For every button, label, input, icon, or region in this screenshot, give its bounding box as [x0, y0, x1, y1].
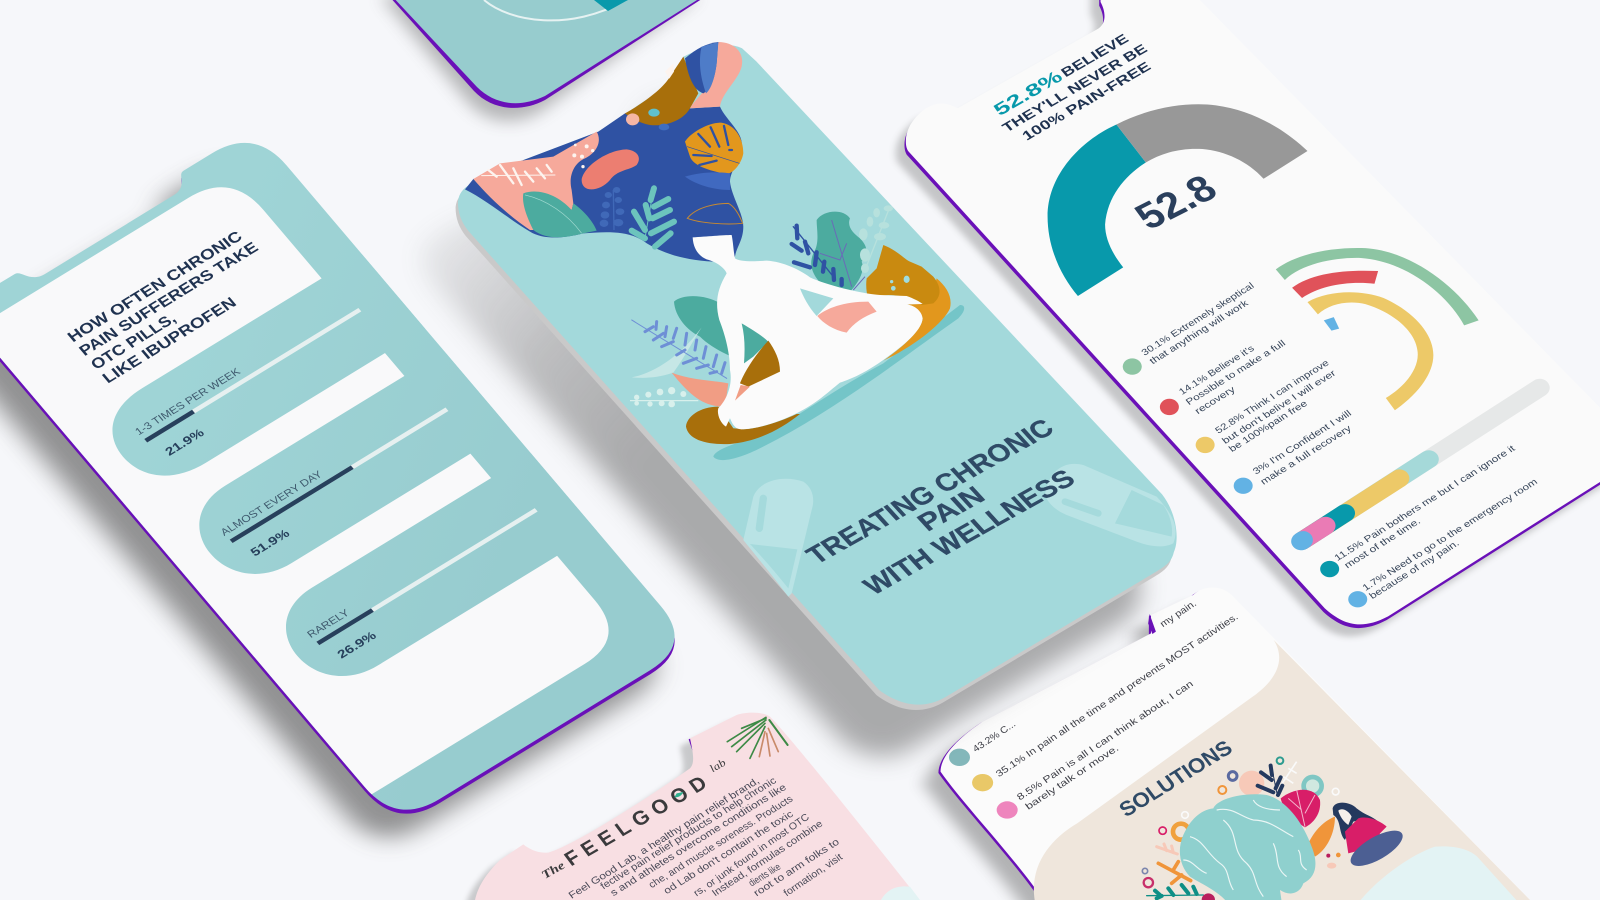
brand logo: FEELGOOD: [560, 772, 712, 871]
phone: 52.8% believe: [904, 0, 1600, 628]
illustration: figure with plants: [630, 205, 964, 460]
illustration: brain and meditating woman: [1142, 757, 1408, 900]
brand description: Instead, formulas combine: [710, 818, 826, 899]
severity legend: [949, 598, 1240, 819]
legend: recovery beliefs: but don't belive I will ever: [1220, 368, 1338, 446]
legend: pain level: most of the time.: [1342, 516, 1423, 571]
brand description: fective pain relief products to help chronic: [599, 776, 779, 892]
legend: pain level: 11.5% Pain bothers me but I can ignore it: [1332, 443, 1518, 564]
heading: [990, 31, 1154, 143]
heading: solutions: SOLUTIONS: [1115, 736, 1237, 822]
pill 3 background: [286, 454, 597, 676]
center phone shadow: [422, 97, 1141, 757]
donut gauge: [1048, 104, 1307, 296]
brand description: od Lab don't contain the toxic: [662, 809, 796, 897]
notch sliver: [1148, 614, 1156, 634]
phone: how often OTC pills: [0, 124, 700, 829]
legend: recovery beliefs: 52.8% Think I can improve: [1213, 358, 1332, 436]
illustration: foliage hair: [465, 42, 743, 262]
brand logo: lab: [708, 758, 729, 775]
phone edge: [689, 737, 697, 755]
icon: ghost pill horizontal: [1045, 464, 1176, 546]
bar: rarely: [306, 497, 555, 666]
legend: recovery beliefs: 30.1% Extremely skeptical: [1139, 281, 1257, 358]
corner panel: [878, 886, 925, 900]
icon: palm leaf: [727, 717, 788, 758]
top phone shadow: [380, 0, 700, 121]
phone: top partial screen: [388, 0, 708, 108]
heading: treating chronic pain with wellness: TREATING CHRONIC: [800, 414, 1060, 569]
phone: pain severity and solutions: [938, 588, 1533, 900]
brand logo: The: [538, 858, 568, 881]
pill 2 background: [199, 352, 510, 574]
bar: 1-3 times per week: [134, 297, 378, 464]
heading: HOW OFTEN CHRONIC: [64, 228, 246, 346]
severity legend: my pain.: [1158, 598, 1199, 629]
pink phone shadow: [465, 721, 915, 900]
heading: 52.8%: [990, 67, 1066, 119]
phone body: [458, 45, 1177, 705]
icon: ghost pill vertical: [743, 479, 813, 597]
phone body: [0, 127, 693, 825]
brand description: dients like: [747, 862, 784, 889]
legend: pain level: because of my pain.: [1367, 538, 1462, 602]
heading: treating chronic pain with wellness: WITH WELLNESS: [857, 464, 1081, 600]
brand description: [567, 776, 845, 900]
severity legend: barely talk or move.: [1023, 743, 1121, 812]
bar: almost every day: 51.9%: [248, 526, 293, 559]
phone edge: [456, 50, 1174, 710]
heading: treating chronic pain with wellness: PAIN: [911, 481, 991, 536]
bar: 1-3 times per week: 1-3 TIMES PER WEEK: [134, 367, 243, 438]
phone body: [941, 588, 1533, 900]
heading: [64, 226, 285, 387]
concentric arc chart: [1276, 248, 1479, 410]
bar: 1-3 times per week: 21.9%: [162, 426, 207, 458]
legend: recovery beliefs: be 100%pain free: [1227, 399, 1310, 455]
phone edge: [904, 0, 1600, 628]
heading: LIKE IBUPROFEN: [99, 295, 240, 387]
legend: pain level: [1320, 443, 1540, 607]
stacked progress bar: [1301, 388, 1540, 541]
phone: the feel good lab: [475, 713, 925, 900]
phone body: [906, 0, 1600, 624]
beige solutions panel: [1034, 640, 1533, 900]
bar: rarely: RARELY: [306, 608, 352, 640]
legend: recovery beliefs: make a full recovery: [1259, 423, 1354, 487]
solutions phone shadow: [926, 603, 1518, 900]
white column panel: [0, 187, 609, 794]
severity legend: 8.5% Pain is all I can think about, I can: [1015, 679, 1196, 803]
legend: pain level: 1.7% Need to go to the emergency room: [1360, 477, 1540, 593]
phone edge: [0, 131, 693, 829]
heading: PAIN SUFFERERS TAKE: [76, 239, 262, 359]
brand logo: [538, 758, 729, 881]
legend: recovery beliefs: 3% I'm Confident I will: [1251, 408, 1354, 477]
donut gauge: 52.8: [1126, 167, 1226, 237]
brand description: rs, or junk found in most OTC: [692, 812, 812, 899]
brand description: s and athletes overcome conditions like: [609, 782, 789, 899]
heading: treating chronic pain with wellness: [800, 414, 1098, 611]
legend: recovery beliefs: 14.1% Believe it's: [1177, 343, 1257, 397]
brand description: formation, visit: [782, 852, 845, 899]
severity legend: 43.2% C...: [971, 719, 1018, 754]
brand description: che, and muscle soreness. Products: [647, 794, 795, 891]
right phone shadow: [896, 0, 1600, 636]
left phone shadow: [0, 155, 674, 853]
heading: OTC PILLS,: [88, 311, 180, 373]
legend: recovery beliefs: Possible to make a full: [1184, 338, 1288, 408]
severity legend: 35.1% In pain all the time and prevents MOST activities.: [994, 612, 1240, 779]
bar: almost every day: ALMOST EVERY DAY: [219, 469, 325, 538]
pale blue panel: [1358, 846, 1519, 900]
brand description: Feel Good Lab, a healthy pain relief brand,: [567, 776, 762, 900]
brand description: root to arm folks to: [752, 837, 842, 899]
phone edge: [938, 589, 1531, 900]
heading: BELIEVE: [1058, 31, 1131, 80]
legend: recovery beliefs: that anything will work: [1148, 298, 1251, 367]
heading: THEY'LL NEVER BE: [999, 41, 1150, 135]
phone: treating chronic pain: [456, 42, 1177, 710]
pill 1 background: [112, 254, 425, 476]
legend: recovery beliefs: [1123, 281, 1354, 494]
bar: rarely: 26.9%: [334, 628, 379, 661]
heading: 100% PAIN-FREE: [1019, 58, 1154, 143]
legend: recovery beliefs: recovery: [1193, 384, 1238, 417]
phone body: [475, 713, 925, 900]
bar: almost every day: [219, 397, 466, 564]
